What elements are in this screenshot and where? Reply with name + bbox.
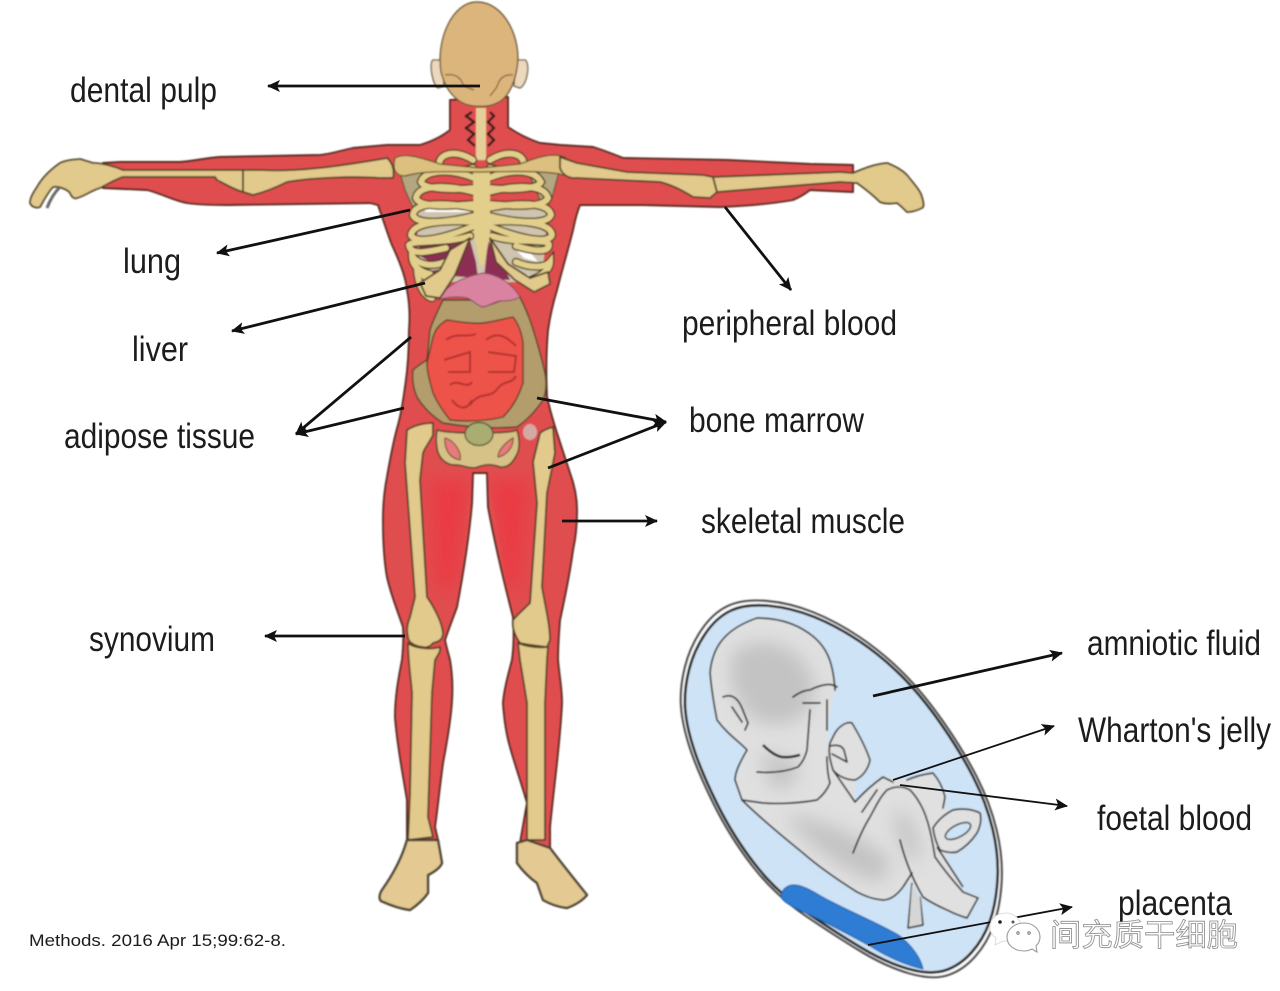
citation: Methods. 2016 Apr 15;99:62-8. xyxy=(29,931,286,950)
label: skeletal muscle: skeletal muscle xyxy=(701,502,905,541)
rib cage xyxy=(409,154,552,298)
left forearm and hand xyxy=(30,159,243,208)
foetus xyxy=(710,618,981,928)
illustration: human body with skeleton xyxy=(30,2,924,910)
amniotic sac xyxy=(681,601,1002,977)
lungs and inner chest xyxy=(416,205,548,282)
icon: chat bubbles watermark xyxy=(990,913,1040,952)
arrow: lung xyxy=(217,210,410,253)
arrow: skeletal muscle xyxy=(562,520,657,522)
label: bone marrow: bone marrow xyxy=(689,401,865,440)
left femur xyxy=(405,423,443,647)
left thumb xyxy=(47,187,60,208)
pelvis xyxy=(436,424,537,468)
label: dental pulp: dental pulp xyxy=(70,71,217,110)
left humerus xyxy=(243,158,394,195)
cervical spine xyxy=(466,108,494,160)
thigh muscle highlight xyxy=(430,480,530,590)
arrow: Wharton's jelly xyxy=(893,726,1054,780)
arrow: placenta xyxy=(868,907,1072,945)
stomach xyxy=(438,273,520,307)
right forearm and hand xyxy=(713,163,924,212)
umbilical loop xyxy=(933,809,981,852)
placenta xyxy=(781,885,923,969)
umbilical cord xyxy=(908,847,963,928)
arrow: bone marrow lower xyxy=(548,422,666,468)
intestines xyxy=(427,317,523,421)
arrow: adipose tissue upper xyxy=(296,337,411,434)
label: placenta: placenta xyxy=(1118,884,1232,923)
head xyxy=(431,2,528,106)
arrow: peripheral blood xyxy=(725,207,791,290)
illustration: foetus in amniotic sac xyxy=(681,601,1002,977)
foetus shading xyxy=(730,642,920,881)
shoulder blades xyxy=(398,166,560,210)
label: peripheral blood: peripheral blood xyxy=(682,304,897,343)
watermark text: 间充质干细胞 xyxy=(1050,918,1238,953)
abdomen tan ring xyxy=(413,297,546,428)
collar bones xyxy=(394,155,569,176)
ear xyxy=(723,696,748,730)
arrow: synovium xyxy=(265,635,405,637)
bladder xyxy=(465,422,493,446)
label: liver: liver xyxy=(132,330,188,369)
right tibia xyxy=(518,643,548,840)
arrow: foetal blood xyxy=(900,785,1067,806)
arrow: liver xyxy=(232,283,425,331)
label: adipose tissue: adipose tissue xyxy=(64,417,255,456)
costal cartilage xyxy=(420,238,550,298)
arrow: amniotic fluid xyxy=(873,653,1062,696)
arrow: dental pulp xyxy=(268,85,480,87)
sternum xyxy=(473,170,490,265)
body silhouette: red muscle xyxy=(103,97,853,848)
label: synovium: synovium xyxy=(89,620,215,659)
right foot xyxy=(517,840,587,908)
arrow: bone marrow upper xyxy=(537,398,666,422)
arrow: adipose tissue lower xyxy=(296,408,404,434)
arm and torso lines xyxy=(833,770,978,918)
left tibia xyxy=(408,643,440,840)
right femur xyxy=(513,427,555,647)
face lines xyxy=(793,684,837,730)
left foot xyxy=(380,840,442,910)
label: foetal blood: foetal blood xyxy=(1097,799,1252,838)
label: lung: lung xyxy=(123,242,181,281)
right humerus xyxy=(560,157,717,198)
hand xyxy=(829,723,870,780)
